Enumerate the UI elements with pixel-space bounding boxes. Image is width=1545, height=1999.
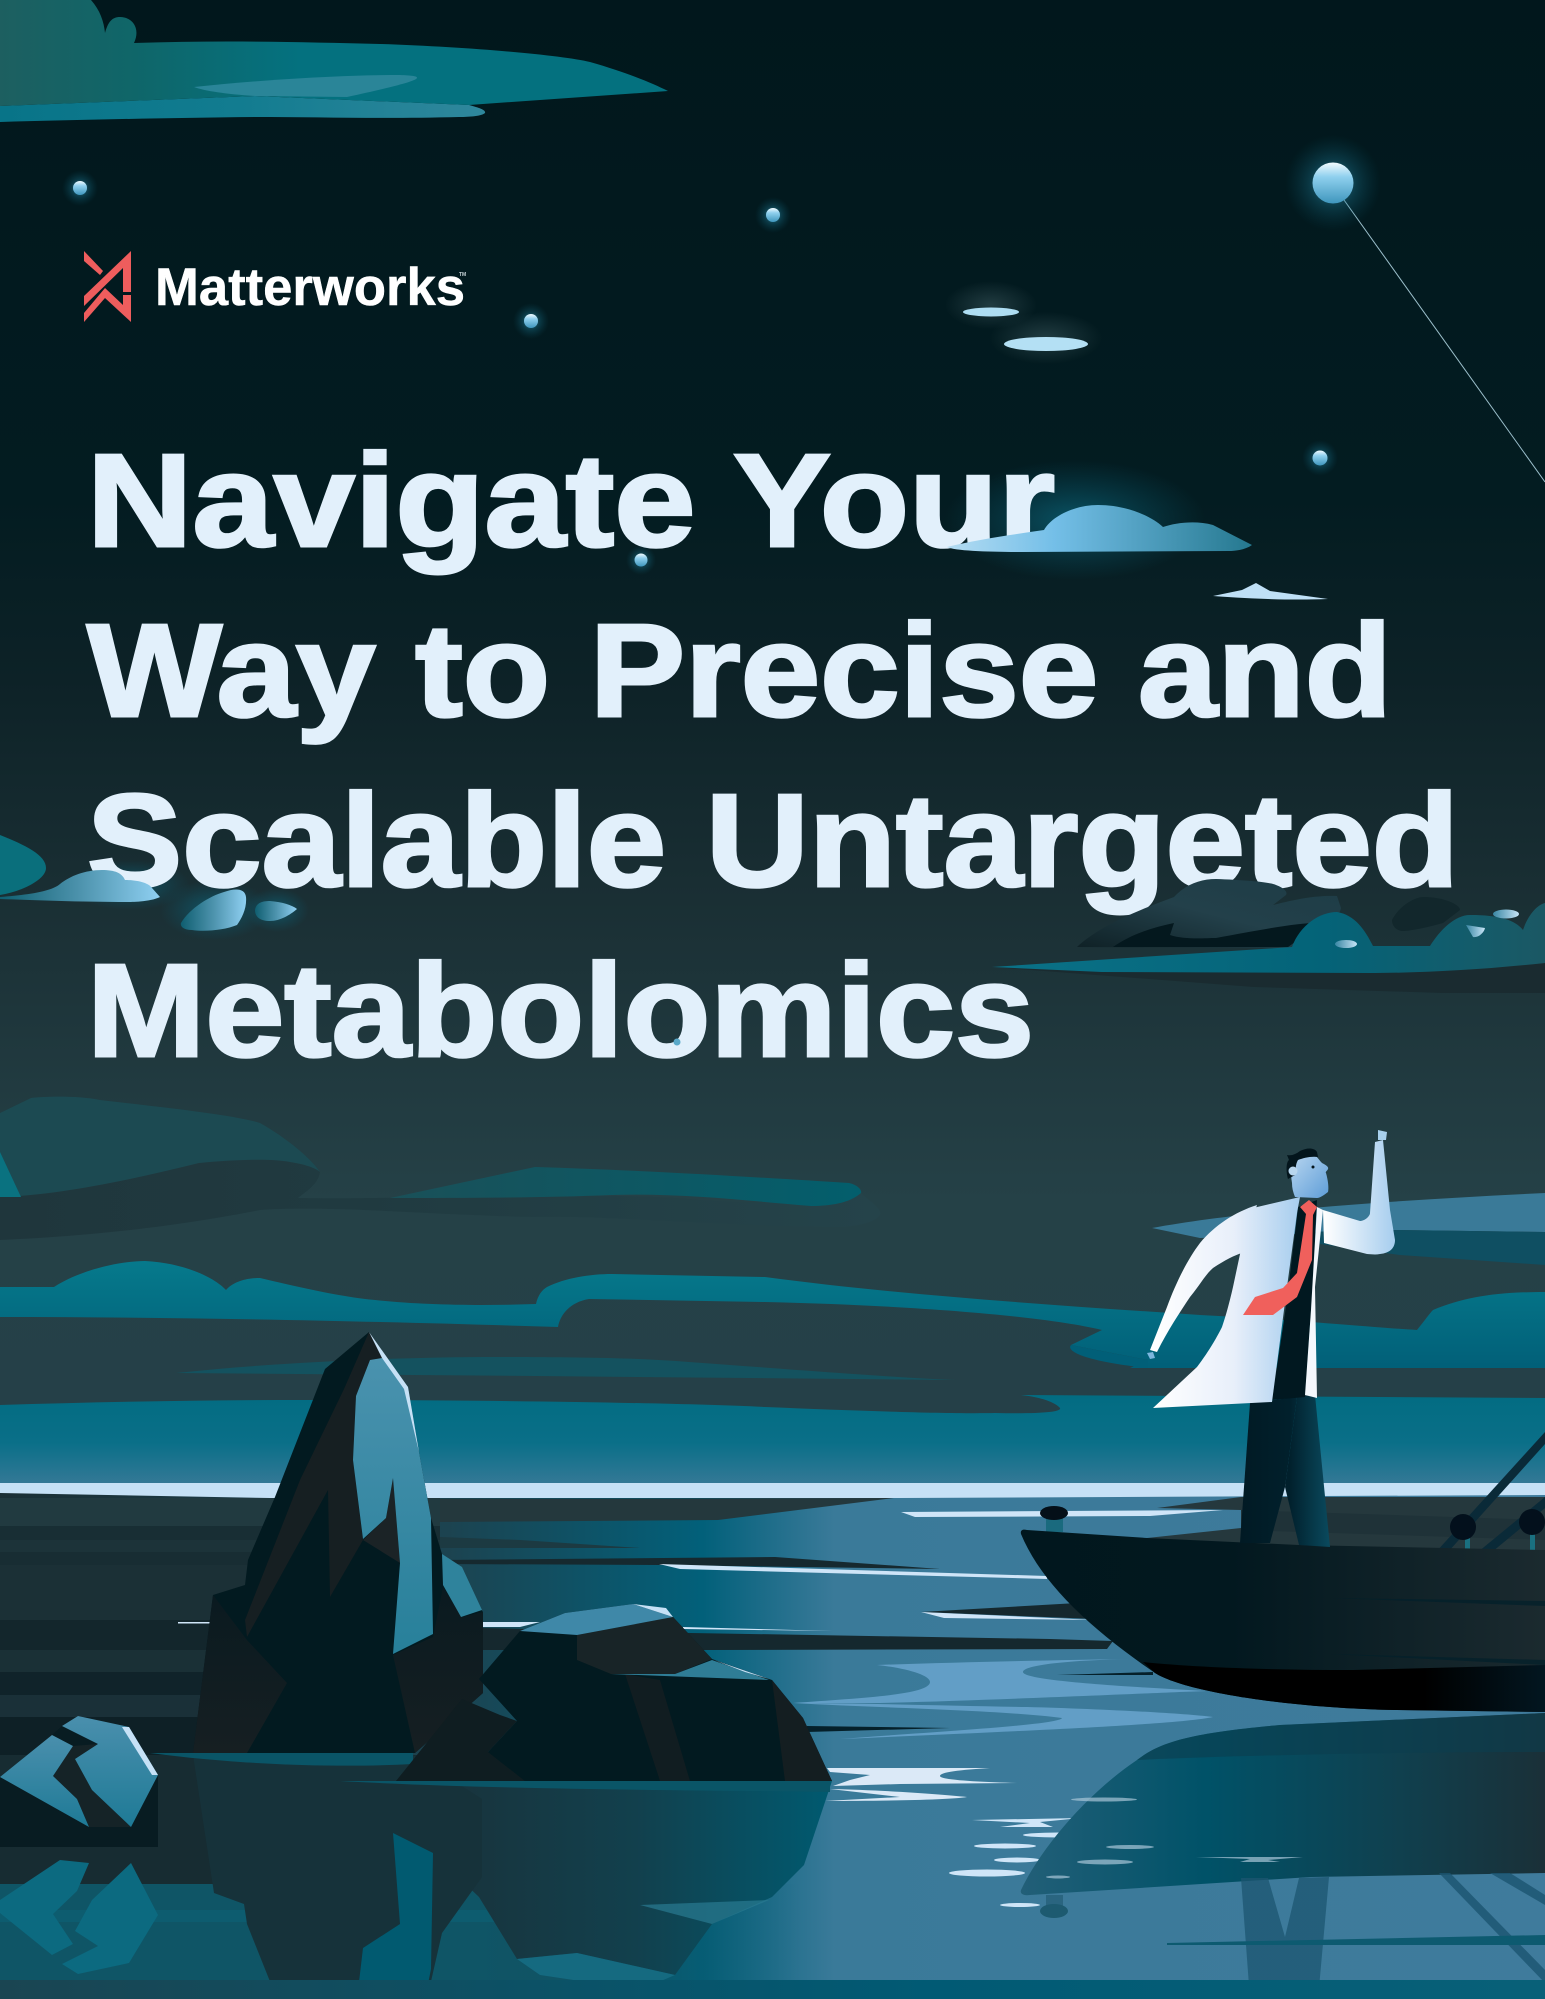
mid left cloud (0, 1097, 880, 1240)
necktie (1243, 1200, 1317, 1315)
logo mark (84, 251, 131, 322)
star dots (62, 170, 1338, 476)
cloud over title: blue (947, 505, 1252, 552)
trademark: TM (459, 272, 466, 278)
water to the right beneath horizon: dark wedge (1147, 1497, 1545, 1552)
horizon light line (0, 1483, 1545, 1498)
right rock (396, 1604, 832, 1781)
dots on title (626, 545, 680, 1046)
shadow water under rocks (0, 1755, 800, 1980)
right rock reflection (396, 1781, 832, 1990)
lens of teal water by right rock (340, 1781, 830, 1792)
title: Metabolomics (87, 937, 1034, 1084)
title: Navigate Your (87, 427, 1055, 574)
tall rock (193, 1332, 483, 1753)
shirt (1272, 1200, 1317, 1400)
logo: Matterworks (84, 251, 466, 322)
small left rock (0, 1716, 158, 1847)
right cloud bank (992, 879, 1545, 993)
lens of teal water at rock base (150, 1753, 413, 1766)
left clouds over title (0, 835, 297, 931)
glows behind title (70, 460, 1205, 940)
legs (1240, 1395, 1330, 1547)
title (87, 427, 1459, 1084)
title: Way to Precise and (87, 597, 1392, 744)
raised arm (1323, 1140, 1395, 1254)
glowing orb with tether line (1285, 135, 1545, 482)
small rock reflection (0, 1860, 158, 1974)
light water patches (793, 1659, 1213, 1739)
bollard (1040, 1506, 1068, 1532)
scientist figure (1147, 1130, 1395, 1547)
upper right cloud behind scientist (1152, 1193, 1545, 1265)
far sleeve (1150, 1205, 1257, 1352)
hand left (1147, 1352, 1155, 1359)
coat front strip (1305, 1207, 1323, 1398)
water surface (0, 1490, 1545, 1999)
title: Scalable Untargeted (87, 767, 1459, 914)
tall rock reflection (193, 1755, 482, 1999)
teal sea band above horizon (0, 1395, 1545, 1490)
ear (1288, 1166, 1298, 1176)
logo wordmark: Matterworks (155, 258, 465, 317)
white water streaks (178, 1510, 1223, 1907)
hand (1378, 1130, 1387, 1140)
oars (1436, 1432, 1545, 1552)
small cloud (1213, 583, 1328, 600)
bottom band of water (0, 1980, 1545, 1999)
boat hull (1021, 1530, 1545, 1712)
small glowing ellipses (945, 281, 1102, 364)
coat body (1153, 1197, 1300, 1408)
mid teal cloud band (0, 1261, 1545, 1380)
eye (1312, 1166, 1314, 1168)
dark water bands, left of the rocks (0, 1498, 440, 1755)
top left cloud (0, 0, 668, 122)
neck and face (1291, 1154, 1328, 1198)
boat reflection (1021, 1713, 1545, 1999)
hair (1287, 1148, 1318, 1179)
dark wedges and strips, right of the rocks (440, 1498, 1153, 1732)
